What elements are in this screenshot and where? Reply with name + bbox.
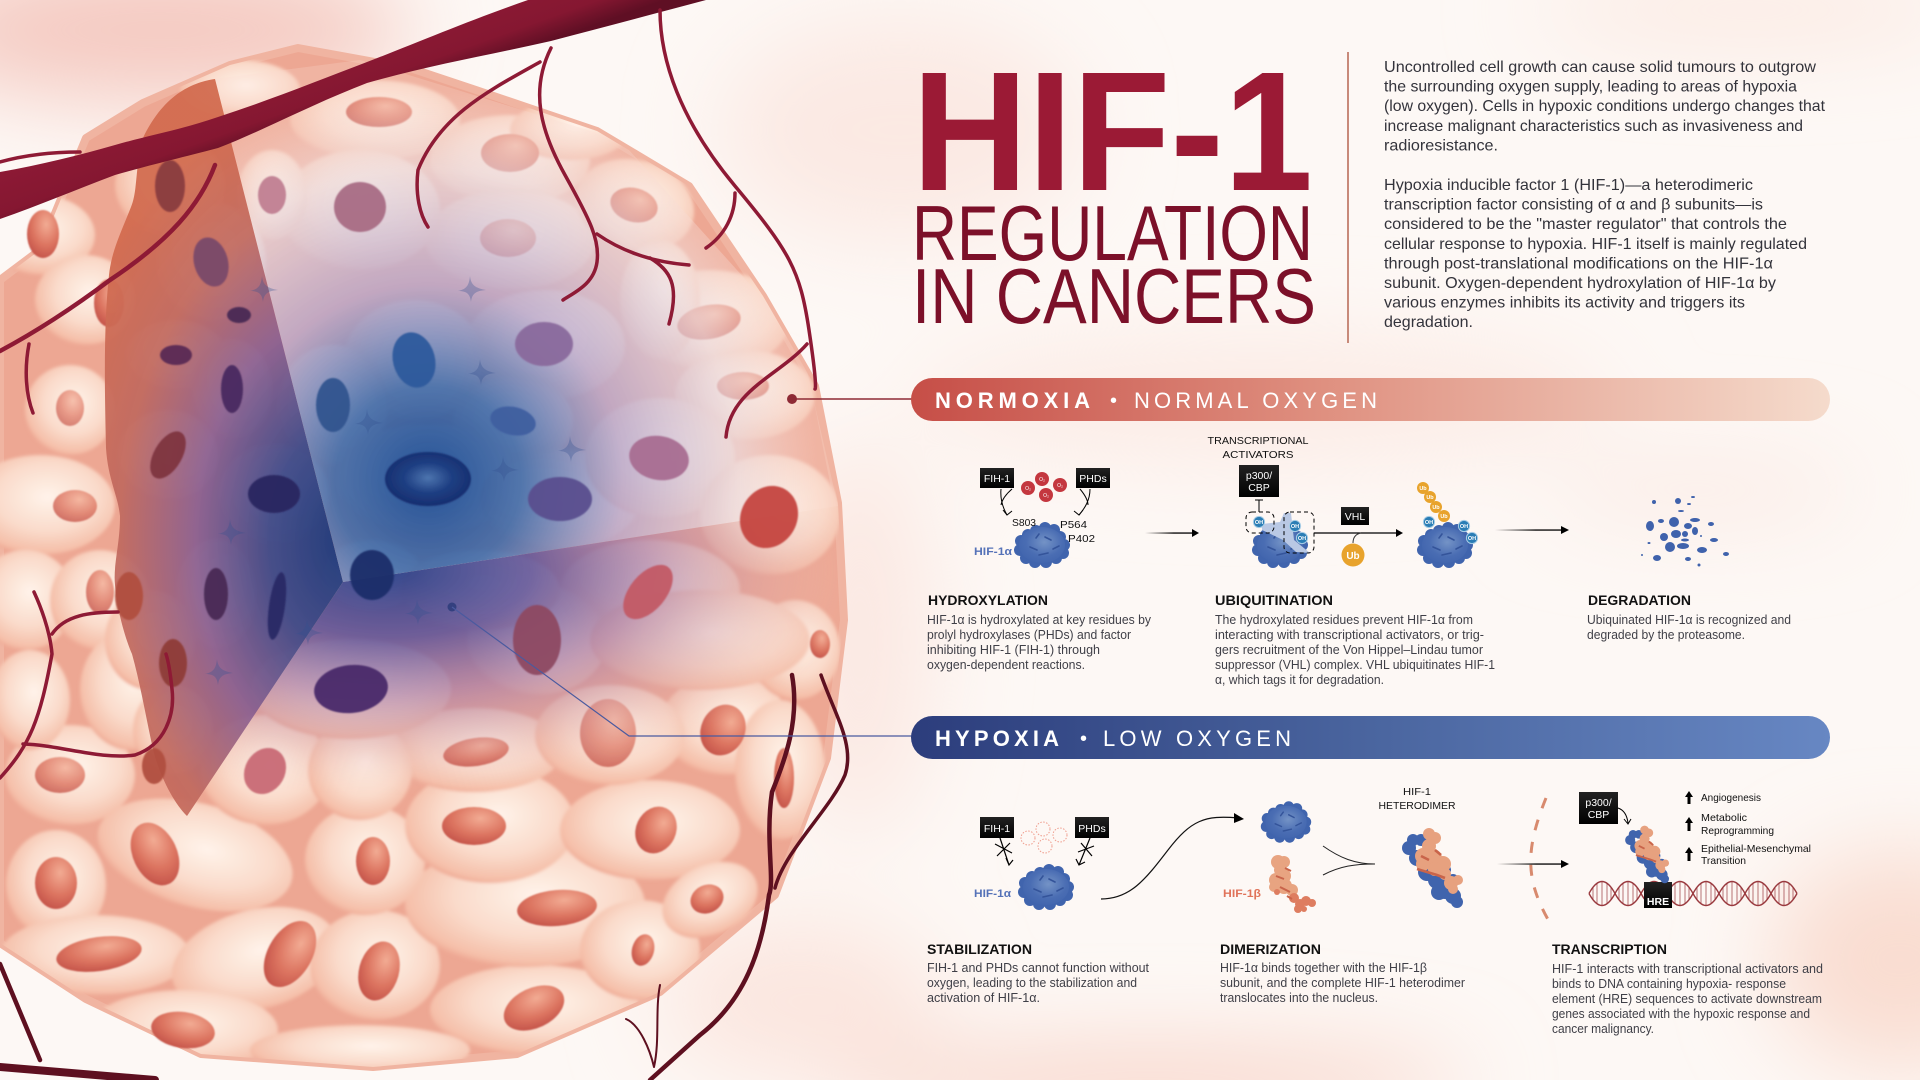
step: hydroxylation diagram: S803 [1012,517,1036,529]
lower dark vessels [0,675,848,1080]
main blood vessel [0,0,706,219]
step: ubiquitination diagram [1208,435,1478,568]
step: hydroxylation diagram: PHDs [1079,473,1107,485]
step: transcription diagram [1579,791,1811,908]
curved arrow [1101,813,1244,899]
definition paragraph: degradation. [1384,314,1473,331]
text: hydroxylation: prolyl hydroxylases (PHDs) and factor [927,628,1131,642]
wedge: upper plane [215,60,838,582]
definition paragraph: various enzymes inhibits its activity and triggers its [1384,295,1745,312]
text: dimerization: subunit, and the complete HIF-1 heterodimer [1220,976,1465,990]
hypoxia banner: HYPOXIA [935,726,1059,751]
step: transcription diagram: Transition [1701,855,1746,867]
step: hydroxylation diagram: FIH-1 [984,473,1010,485]
text: hydroxylation: HIF-1α is hydroxylated at key residues by [927,613,1152,627]
step: ubiquitination diagram: VHL [1345,511,1365,523]
step: transcription diagram: HRE [1647,896,1669,908]
step: degradation fragments [1641,496,1729,566]
step: transcription diagram: Reprogramming [1701,825,1774,837]
definition paragraph [1384,177,1807,331]
hypoxia banner [911,716,1830,759]
text: dimerization: HIF-1α binds together with the HIF-1β [1220,961,1427,975]
title: HIF-1 [912,37,1313,227]
arrow [1497,860,1569,868]
text: dimerization: translocates into the nucleus. [1220,991,1378,1005]
step: hydroxylation diagram: O₂ [1025,486,1031,492]
step: stabilization diagram [974,817,1109,910]
step: dimerization diagram: HIF-1 [1403,786,1431,798]
definition paragraph: transcription factor consisting of α and β subunits—is [1384,197,1763,214]
branching vessels [0,10,815,778]
text: stabilization: activation of HIF-1α. [927,991,1040,1005]
text: degradation: DEGRADATION [1588,593,1691,608]
title: IN CANCERS [912,252,1316,340]
membrane junctions [205,276,586,685]
text: degradation: Ubiquinated HIF-1α is recognized and [1587,613,1791,627]
step: transcription diagram: CBP [1588,809,1609,821]
tumour cells [0,60,840,1075]
text: ubiquitination [1215,593,1495,687]
text: ubiquitination: α, which tags it for degradation. [1215,673,1384,687]
text: ubiquitination: interacting with transcriptional activators, or trig- [1215,628,1484,642]
text: stabilization [927,942,1149,1005]
step: ubiquitination diagram: Ub [1346,551,1360,562]
step: transcription diagram: p300/ [1585,797,1612,809]
definition paragraph: Hypoxia inducible factor 1 (HIF-1)—a heterodimeric [1384,177,1753,194]
step: ubiquitination diagram: CBP [1248,482,1270,494]
step: hydroxylation diagram: HIF-1α [974,546,1012,558]
text: transcription: binds to DNA containing hypoxia- response [1552,977,1786,991]
hypoxia banner: • [1080,728,1087,750]
step: stabilization diagram: HIF-1α [974,888,1011,900]
step: hydroxylation diagram: O₂ [1057,483,1063,489]
text: degradation [1587,593,1791,642]
text: degradation: degraded by the proteasome. [1587,628,1745,642]
nucleus boundary [1531,798,1550,923]
intro paragraph: Uncontrolled cell growth can cause solid tumours to outgrow [1384,59,1816,76]
step: hydroxylation diagram: O₂ [1039,477,1045,483]
intro paragraph: radioresistance. [1384,137,1498,154]
step: stabilization diagram: FIH-1 [984,823,1010,835]
tumour illustration [0,0,848,1080]
title [912,37,1316,340]
wedge: lower plane [229,512,806,776]
text: transcription: HIF-1 interacts with transcriptional activators and [1552,962,1823,976]
arrow [1495,526,1569,534]
hypoxia banner: LOW OXYGEN [1103,726,1291,751]
hypoxia leader line [448,602,912,736]
step: hydroxylation diagram: O₂ [1043,493,1049,499]
text: stabilization: oxygen, leading to the stabilization and [927,976,1137,990]
step: dimerization diagram: HIF-1β [1223,888,1261,900]
nuclei outer cells [27,97,830,1052]
intro paragraph: (low oxygen). Cells in hypoxic conditions undergo changes that [1384,98,1826,115]
text: transcription: genes associated with the hypoxic response and [1552,1007,1810,1021]
step: dimerization diagram: HETERODIMER [1378,800,1456,812]
step: hydroxylation diagram: P564 [1060,519,1087,531]
tumour body [0,48,844,1067]
text: hydroxylation: HYDROXYLATION [928,593,1048,608]
text: transcription [1552,942,1823,1036]
text: dimerization: DIMERIZATION [1220,942,1321,957]
text: stabilization: FIH-1 and PHDs cannot function without [927,961,1149,975]
definition paragraph: considered to be the "master regulator" that controls the [1384,216,1787,233]
title: REGULATION [912,189,1313,277]
step: transcription diagram: Angiogenesis [1701,792,1761,804]
text: hydroxylation: inhibiting HIF-1 (FIH-1) through [927,643,1100,657]
normoxia banner [911,378,1830,421]
step: hydroxylation diagram [974,468,1110,568]
text: ubiquitination: gers recruitment of the Von Hippel–Lindau tumor [1215,643,1483,657]
text: dimerization [1220,942,1465,1005]
definition paragraph: through post-translational modifications on the HIF-1α [1384,255,1773,272]
step: hydroxylation diagram: P402 [1068,533,1095,545]
text: ubiquitination: suppressor (VHL) complex. VHL ubiquitinates HIF-1 [1215,658,1495,672]
step: transcription diagram: Epithelial-Mesenchymal [1701,843,1811,855]
arrow [1145,529,1199,537]
intro paragraph [1384,59,1826,154]
normoxia banner: NORMAL OXYGEN [1134,388,1377,413]
text: transcription: TRANSCRIPTION [1552,942,1667,957]
intro paragraph: the surrounding oxygen supply, leading to areas of hypoxia [1384,79,1797,96]
step: dimerization diagram [1223,786,1463,913]
step: stabilization diagram: PHDs [1078,823,1106,835]
normoxia banner: • [1110,390,1117,412]
text: ubiquitination: UBIQUITINATION [1215,593,1333,608]
normoxia leader line [787,394,912,404]
text: hydroxylation: oxygen-dependent reactions. [927,658,1085,672]
normoxia banner: NORMOXIA [935,388,1090,413]
text: transcription: cancer malignancy. [1552,1022,1654,1036]
step: transcription diagram: Metabolic [1701,812,1747,824]
step: ubiquitination diagram: TRANSCRIPTIONAL [1208,435,1309,447]
text: ubiquitination: The hydroxylated residues prevent HIF-1α from [1215,613,1473,627]
step: ubiquitination diagram: ACTIVATORS [1222,449,1294,461]
text: hydroxylation [927,593,1152,672]
definition paragraph: subunit. Oxygen-dependent hydroxylation of HIF-1α by [1384,275,1776,292]
text: stabilization: STABILIZATION [927,942,1032,957]
nuclei inside the wedge [115,160,809,802]
intro paragraph: increase malignant characteristics such as invasiveness and [1384,118,1803,135]
text: transcription: element (HRE) sequences to activate downstream [1552,992,1822,1006]
wedge: left wall [105,79,343,816]
definition paragraph: cellular response to hypoxia. HIF-1 itself is mainly regulated [1384,236,1807,253]
title divider [1347,52,1349,343]
step: ubiquitination diagram: p300/ [1246,470,1272,482]
